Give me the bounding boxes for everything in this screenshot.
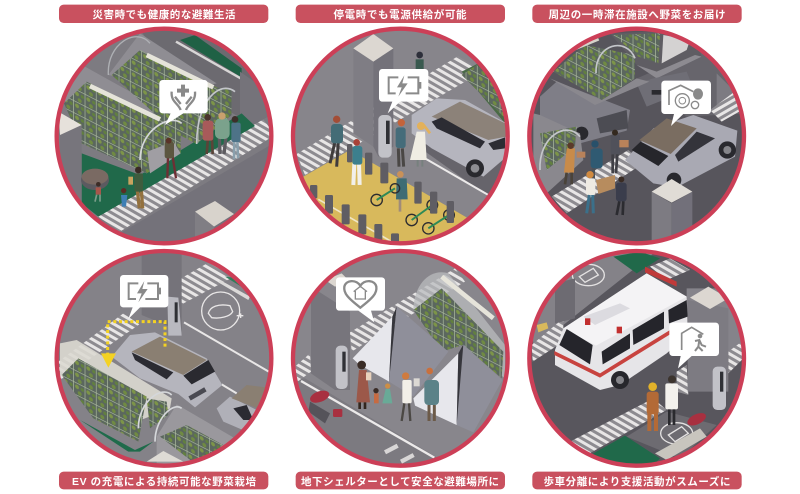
road marking: EV plug icon [202, 292, 243, 330]
people [564, 142, 575, 184]
rear greenhouse [613, 33, 702, 78]
heading: vegetable delivery: 周辺の一時滞在施設へ野菜をお届け [548, 8, 725, 21]
heading: power supply during outage: 停電時でも電源供給が可能 [333, 8, 467, 21]
heading: power supply during outage [296, 5, 505, 23]
greenhouse [413, 272, 505, 378]
scene: tents and evacuees [290, 248, 513, 478]
ring [529, 29, 744, 243]
scene: delivery around EV [532, 30, 742, 242]
greenhouses [60, 340, 172, 452]
crosswalks [180, 262, 231, 304]
scene: charging station and bike share [295, 30, 506, 242]
pillar [353, 34, 393, 157]
panel: power supply during outage [290, 5, 515, 257]
front greenhouse [550, 38, 649, 105]
heading: shelter safe place [296, 472, 505, 489]
panel: smooth support with separated pedestrians [527, 248, 750, 489]
pillar [311, 273, 350, 390]
crosswalk left [552, 150, 643, 213]
pillar [142, 248, 182, 332]
firefighter [647, 382, 659, 431]
ring [529, 251, 744, 466]
power flow arrow [101, 322, 165, 368]
ring [293, 29, 508, 243]
people [330, 116, 343, 167]
left greenhouse [533, 113, 583, 193]
EV charger [167, 297, 182, 336]
ambulance [554, 267, 688, 390]
cardboard box [596, 175, 615, 194]
manhole [81, 169, 109, 190]
EV car [625, 115, 737, 187]
red bags and cart [308, 388, 342, 423]
panel: healthy evacuation life [53, 5, 280, 257]
EV car [412, 98, 507, 177]
crosswalk [297, 56, 482, 175]
heading: smooth support activity: 歩車分離により支援活動がスムーズに [543, 475, 730, 488]
heading: smooth support activity [532, 472, 742, 489]
crosswalks [350, 268, 465, 352]
callout: battery icon [120, 275, 168, 319]
callout: battery icon [379, 69, 428, 113]
crosswalks [650, 258, 690, 280]
callout: evacuation runner icon [669, 323, 719, 368]
heading: shelter safe place: 地下シェルターとして安全な避難場所に [301, 475, 499, 488]
tent two [413, 344, 502, 432]
yellow plaza [304, 152, 467, 242]
callout: house and vegetables icon [661, 81, 711, 126]
scene: ambulance and responders [527, 248, 750, 475]
greenhouse rear [108, 37, 235, 144]
EV charger [713, 367, 726, 410]
panel: EV charging for vegetable farming [53, 248, 277, 489]
parked car [540, 82, 630, 143]
heading: sustainable vegetable cultivation: EV の充電による持続可能な野菜栽培 [72, 475, 256, 488]
distant person [416, 52, 424, 69]
heading: vegetable delivery [532, 5, 742, 23]
road line [301, 381, 434, 458]
panel: underground shelter [290, 248, 513, 489]
crosswalk [97, 119, 275, 232]
concrete cap [195, 201, 234, 240]
greenhouse front [64, 82, 182, 173]
ring [57, 251, 271, 466]
doctor [665, 375, 678, 425]
rear car [637, 72, 690, 107]
red bag [685, 411, 708, 428]
EV charger [378, 115, 392, 158]
callout: care hands icon [159, 80, 208, 125]
scene: vegetable greenhouses and residents [58, 30, 270, 242]
EV charger [336, 346, 348, 389]
people [356, 361, 371, 409]
heading: sustainable vegetable cultivation [59, 472, 268, 489]
column [58, 112, 82, 203]
heading: healthy evacuation life: 災害時でも健康的な避難生活 [92, 8, 236, 21]
panel: vegetable delivery [527, 5, 750, 253]
bikes and docks [371, 184, 454, 234]
green strip [82, 113, 255, 217]
sidewalk and marking [627, 412, 717, 458]
scene: charging with power flow [58, 253, 270, 464]
ring [57, 29, 271, 243]
heading: healthy evacuation life [59, 5, 268, 23]
people [203, 114, 213, 154]
road markings [572, 264, 604, 286]
second car [217, 385, 273, 432]
tent one [353, 307, 448, 397]
crosswalk right [711, 93, 739, 122]
callout: heart house icon [336, 277, 385, 322]
pillar [652, 179, 692, 240]
EV car [112, 332, 222, 407]
green corners [613, 252, 660, 273]
pillar [688, 287, 728, 392]
ring [293, 251, 508, 466]
